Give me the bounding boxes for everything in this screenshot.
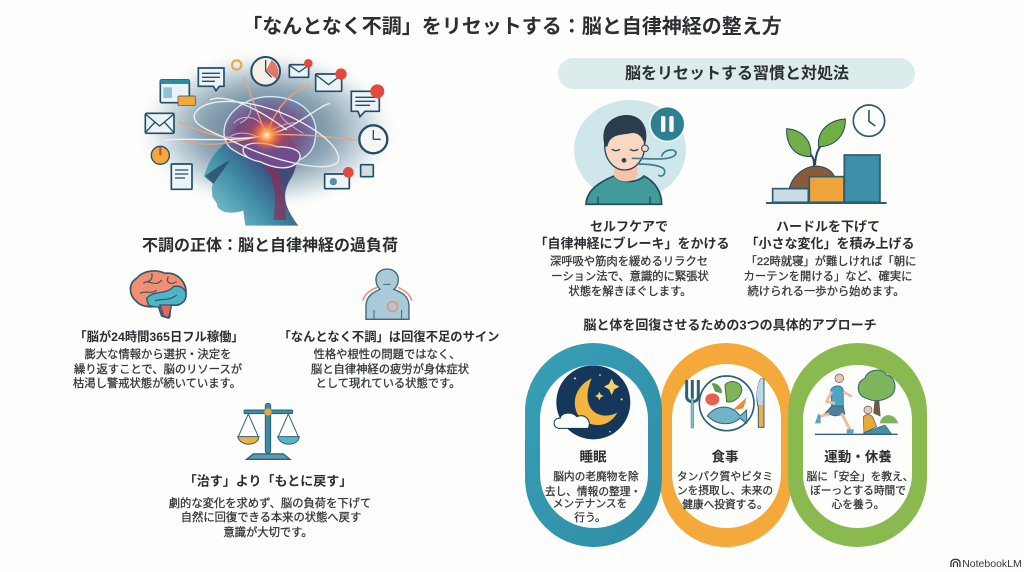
- body text: 深呼吸や筋肉を緩めるリラクセ: [550, 254, 708, 268]
- description: 脳内の老廃物を除: [553, 470, 639, 483]
- subheading: セルフケアで: [590, 218, 668, 234]
- body text: 「22時就寝」が難しければ「朝に: [746, 254, 916, 268]
- icon: runner and tree: [815, 370, 898, 435]
- description: メンテナンスを: [553, 498, 627, 510]
- text block: self care: [534, 218, 730, 298]
- body text: として現れている状態です。: [315, 376, 461, 390]
- text block: small change: [744, 218, 916, 298]
- description: タンパク質やビタミ: [677, 470, 773, 483]
- icon: breathing person: [574, 100, 686, 205]
- icon: balance scale: [238, 403, 299, 459]
- icon: moon: [554, 365, 630, 439]
- body text: 自然に回復できる本来の状態へ戻す: [181, 510, 361, 524]
- heading: 脳と体を回復させるための3つの具体的アプローチ: [583, 318, 877, 332]
- body text: 性格や根性の問題ではなく、: [314, 347, 460, 361]
- subheading: 「治す」より「もとに戻す」: [184, 474, 352, 488]
- icon: tired body: [363, 269, 412, 319]
- panel: habits: [534, 58, 916, 298]
- text block: restore: [169, 474, 371, 539]
- panel: causes: [73, 48, 499, 539]
- label: 食事: [712, 448, 739, 464]
- body text: 続けられる一歩から始めます。: [747, 284, 905, 298]
- body text: 膨大な情報から選択・決定を: [85, 347, 231, 361]
- label: 運動・休養: [824, 448, 892, 464]
- description: ンを摂取し、未来の: [677, 484, 773, 497]
- description: 行う。: [574, 511, 606, 524]
- logo: NotebookLM: NotebookLM: [962, 558, 1022, 570]
- illustration: overloaded brain: [133, 48, 400, 226]
- body text: 枯渇し警戒状態が続いています。: [73, 376, 241, 390]
- heading pill: 脳をリセットする習慣と対処法: [625, 64, 849, 82]
- heading pill: [558, 58, 915, 89]
- description: 脳に「安全」を教え、: [807, 470, 913, 483]
- icon: plate: [687, 376, 764, 431]
- description: 健康へ投資する。: [682, 498, 768, 511]
- subheading: 「自律神経にブレーキ」をかける: [534, 236, 730, 250]
- icon: brain: [130, 271, 186, 318]
- subheading: ハードルを下げて: [776, 218, 880, 234]
- text block: recovery sign: [279, 329, 499, 390]
- body text: 意識が大切です。: [223, 525, 313, 539]
- body text: 繰り返すことで、脳のリソースが: [74, 362, 242, 376]
- description: 心を養う。: [832, 498, 884, 511]
- body text: 劇的な変化を求めず、脳の負荷を下げて: [169, 496, 371, 510]
- title: 「なんとなく不調」をリセットする：脳と自律神経の整え方: [242, 15, 782, 38]
- card: meal: [660, 343, 792, 547]
- card: exercise and rest: [788, 343, 927, 547]
- body text: 状態を解きほぐします。: [568, 284, 692, 298]
- description: ぼーっとする時間で: [810, 485, 906, 497]
- subheading: 「小さな変化」を積み上げる: [745, 236, 915, 250]
- card: sleep: [525, 343, 662, 547]
- icon: sprout and steps: [766, 105, 887, 204]
- body text: カーテンを開ける」など、確実に: [744, 270, 912, 283]
- panel: approaches: [525, 318, 927, 547]
- body text: 脳と自律神経の疲労が身体症状: [311, 362, 469, 376]
- subheading: 「なんとなく不調」は回復不足のサイン: [279, 329, 499, 344]
- label: 睡眠: [580, 450, 607, 464]
- text block: full-time brain: [73, 329, 244, 390]
- body text: ーション法で、意識的に緊張状: [551, 269, 709, 283]
- heading: section left: 不調の正体：脳と自律神経の過負荷: [142, 236, 398, 254]
- description: 去し、情報の整理・: [545, 485, 641, 498]
- subheading: 「脳が24時間365日フル稼働」: [74, 329, 244, 344]
